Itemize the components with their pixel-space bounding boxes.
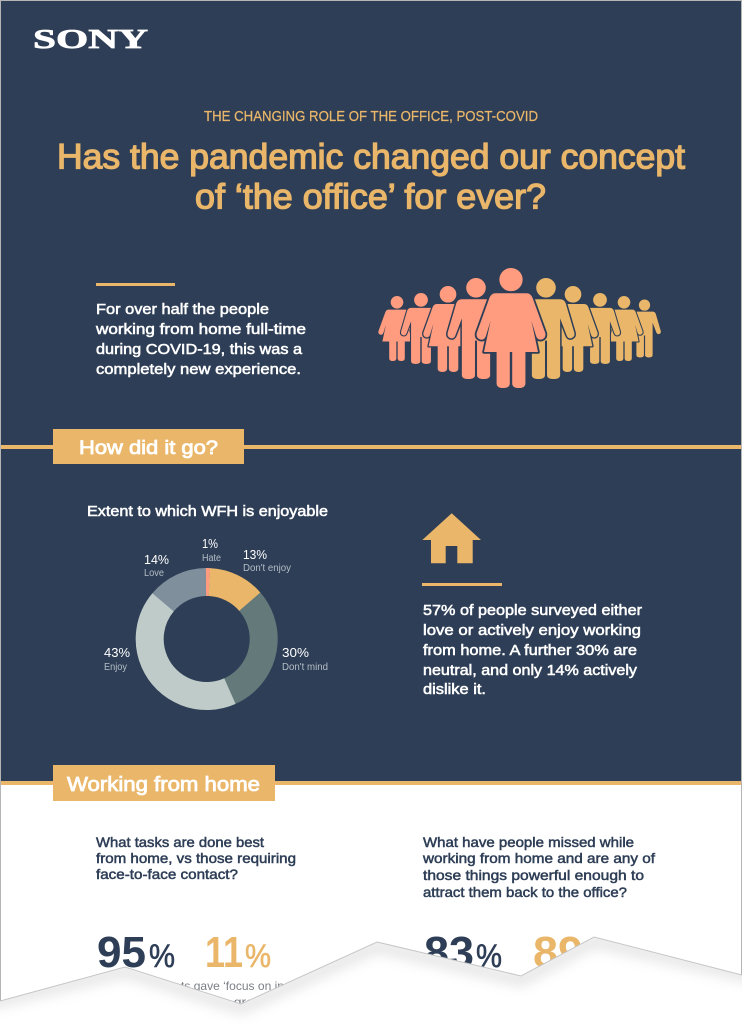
navy background panel <box>0 0 742 783</box>
donut labels: 43% <box>104 645 130 660</box>
right question: What have people missed while <box>423 834 634 850</box>
torn paper shadow <box>0 941 742 1008</box>
WFH summary text: 57% of people surveyed either <box>423 602 642 619</box>
truncated body text: e gro <box>222 995 254 1009</box>
donut labels <box>104 536 328 673</box>
left question: from home, vs those requiring <box>96 850 296 866</box>
icon: crowd of people <box>378 268 661 388</box>
torn paper edge <box>0 937 742 1024</box>
stat: 83%: 83 <box>424 928 474 977</box>
left question <box>96 834 296 882</box>
donut chart <box>126 559 287 719</box>
donut labels: Hate <box>202 553 221 564</box>
stat: 11%: 11 <box>205 928 243 977</box>
stat percent sign: 83%: % <box>476 938 502 974</box>
stat: 89%: 89 <box>533 928 583 977</box>
stat: 95%: 95 <box>97 928 146 977</box>
donut labels: Love <box>144 568 164 579</box>
section band: Working from home: Working from home <box>67 774 260 796</box>
donut labels: Enjoy <box>104 662 127 673</box>
donut labels: 14% <box>144 552 169 567</box>
intro text: completely new experience. <box>96 361 301 378</box>
eyebrow heading: THE CHANGING ROLE OF THE OFFICE, POST-COVID <box>204 108 538 125</box>
right question: working from home and are any of <box>422 850 655 866</box>
section band: Working from home <box>0 765 742 801</box>
torn paper line <box>0 937 742 1004</box>
intro text: For over half the people <box>96 301 269 318</box>
donut labels: Don't enjoy <box>243 563 291 574</box>
WFH summary text: dislike it. <box>423 681 486 698</box>
title: Has the pandemic changed our concept <box>57 138 685 176</box>
title: of ‘the office’ for ever? <box>195 178 546 216</box>
left question: What tasks are done best <box>96 834 264 850</box>
chart heading: Extent to which WFH is enjoyable <box>87 503 328 520</box>
stat percent sign: 11%: % <box>245 938 271 974</box>
intro text: during COVID-19, this was a <box>96 341 303 358</box>
truncated body text: ts gave ‘focus on in <box>181 979 284 993</box>
section band: How did it go? <box>0 429 742 464</box>
white lower panel <box>0 783 742 1024</box>
right question <box>422 834 655 900</box>
WFH summary text: neutral, and only 14% actively <box>423 662 638 679</box>
title <box>57 138 685 216</box>
section band: How did it go?: How did it go? <box>79 437 218 459</box>
intro text <box>95 301 306 378</box>
right question: attract them back to the office? <box>423 884 627 900</box>
WFH summary text: from home. A further 30% are <box>423 642 637 659</box>
torn paper mask <box>0 937 742 1024</box>
intro text: working from home full-time <box>95 321 306 338</box>
WFH summary text: love or actively enjoy working <box>423 622 641 639</box>
Sony logo: SONY <box>33 24 148 54</box>
donut labels: Don't mind <box>282 662 328 673</box>
donut labels: 13% <box>243 547 267 562</box>
intro rule <box>96 283 175 286</box>
right question: those things powerful enough to <box>423 867 644 883</box>
intro block <box>95 283 306 378</box>
left question: face-to-face contact? <box>96 866 238 882</box>
WFH summary text <box>423 602 642 698</box>
icon: house <box>422 513 481 563</box>
house rule <box>422 583 502 586</box>
stat percent sign: 95%: % <box>149 938 175 974</box>
donut labels: 1% <box>202 536 218 551</box>
donut labels: 30% <box>282 645 309 660</box>
truncated body text <box>181 979 284 1009</box>
